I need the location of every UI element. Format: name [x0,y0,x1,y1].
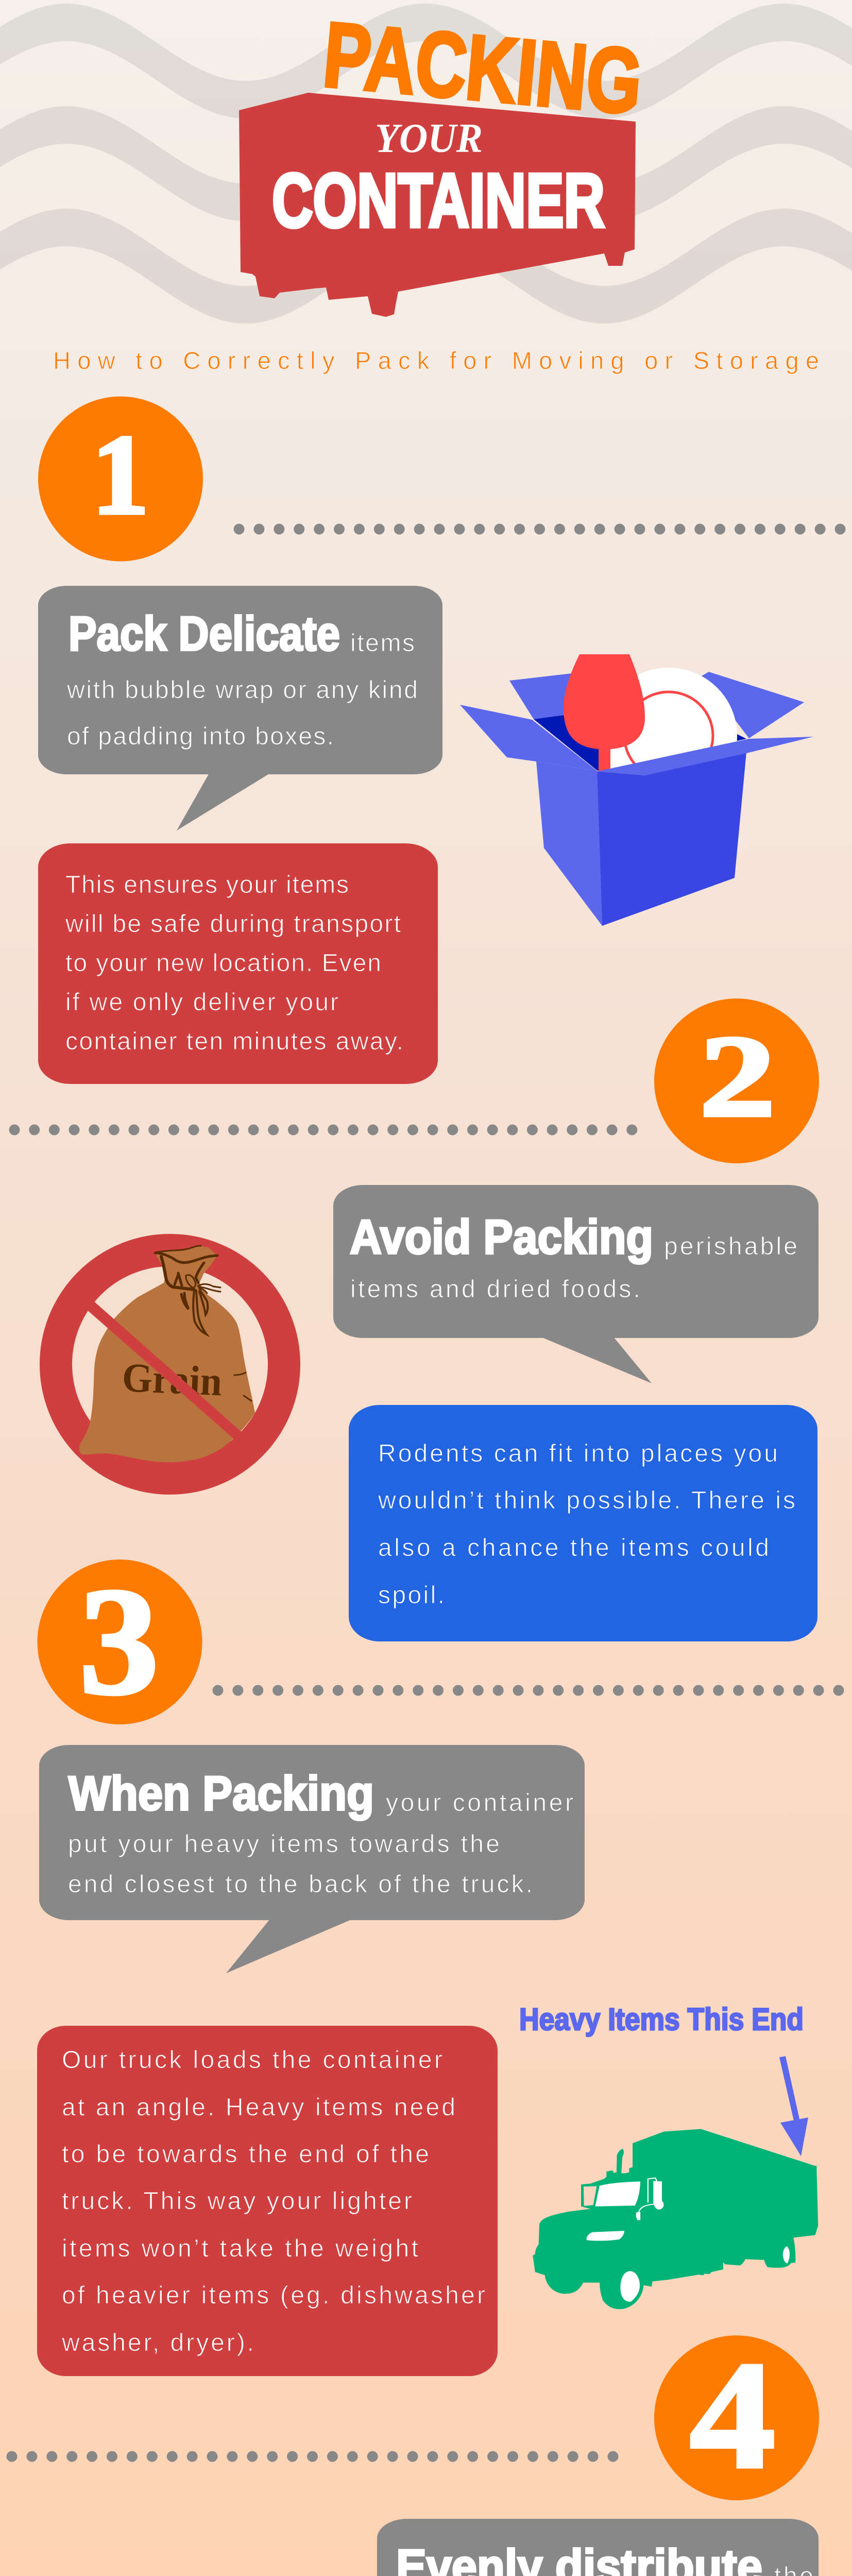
step 3 number badge [37,1556,202,1726]
panel: pack delicate speech bubble: Pack Delicate [69,606,340,660]
panel: when packing speech bubble: your container [386,1789,573,1817]
arrow: pointing to truck end [779,2056,808,2156]
subtitle: How to Correctly Pack for Moving or Storage [53,347,819,374]
panel: pack delicate explanation: will be safe during transport [65,910,401,938]
panel: pack delicate speech bubble [38,586,442,831]
panel: when packing explanation: at an angle. Heavy items need [62,2094,455,2121]
title block [239,3,646,317]
panel: avoid packing explanation: Rodents can fit into places you [378,1440,778,1467]
icon: no grain sack [56,1246,284,1479]
panel: avoid packing explanation [349,1405,817,1641]
step 4 number badge: 4 [690,2330,775,2500]
panel: when packing explanation [37,2026,498,2376]
panel: when packing explanation: to be towards the end of the [62,2141,429,2168]
panel: pack delicate explanation: This ensures your items [65,871,349,899]
panel: when packing explanation: items won’t take the weight [62,2235,418,2262]
panel: pack delicate speech bubble: with bubble wrap or any kind [66,676,418,704]
step 3 number badge: 3 [79,1556,159,1726]
icon: no grain sack: Grain [121,1355,223,1404]
panel: when packing explanation: truck. This way your lighter [62,2188,412,2215]
panel: pack delicate speech bubble: items [350,630,415,657]
panel: avoid packing explanation: spoil. [378,1582,445,1609]
title word: PACKING: PACKING [320,3,646,133]
panel: avoid packing speech bubble: Avoid Packing [350,1210,653,1264]
panel: when packing speech bubble: When Packing [69,1766,374,1820]
dotted divider 2 [14,1124,634,1136]
wavy background bands [0,4,852,324]
panel: pack delicate explanation [38,843,438,1084]
step 1 number badge: 1 [92,412,149,538]
panel: pack delicate explanation: to your new location. Even [65,950,381,977]
dotted divider 4 [12,2451,614,2462]
panel: avoid packing explanation: wouldn’t think possible. There is [378,1487,795,1514]
callout: heavy items this end: Heavy Items This End [519,2002,804,2037]
panel: when packing explanation: Our truck loads the container [62,2046,442,2074]
panel: when packing explanation: washer, dryer). [61,2329,254,2357]
step 2 number badge [654,998,819,1163]
title word: YOUR: YOUR [375,116,483,161]
panel: avoid packing explanation: also a chance the items could [378,1534,769,1562]
panel: pack delicate speech bubble: of padding into boxes. [67,723,334,750]
panel: pack delicate explanation: if we only deliver your [65,989,338,1016]
title banner [239,93,636,317]
panel: evenly distribute speech bubble [377,2519,819,2576]
panel: avoid packing speech bubble: perishable [664,1233,797,1260]
panel: when packing speech bubble [39,1745,585,1973]
panel: when packing speech bubble: end closest to the back of the truck. [68,1871,533,1898]
panel: pack delicate explanation: container ten minutes away. [65,1028,403,1055]
panel: when packing speech bubble: put your heavy items towards the [68,1831,500,1858]
icon: open box with glass and plate [460,654,813,927]
title word: CONTAINER: CONTAINER [272,158,605,243]
panel: when packing explanation: of heavier items (eg. dishwasher [62,2282,485,2309]
panel: avoid packing speech bubble: items and dried foods. [350,1276,640,1303]
dotted divider 1 [239,523,841,535]
step 4 number badge [654,2330,819,2500]
dotted divider 3 [218,1685,841,1696]
step 2 number badge: 2 [700,1012,775,1141]
panel: avoid packing speech bubble [333,1185,819,1383]
icon: green truck [533,2129,818,2309]
step 1 number badge [38,397,203,562]
